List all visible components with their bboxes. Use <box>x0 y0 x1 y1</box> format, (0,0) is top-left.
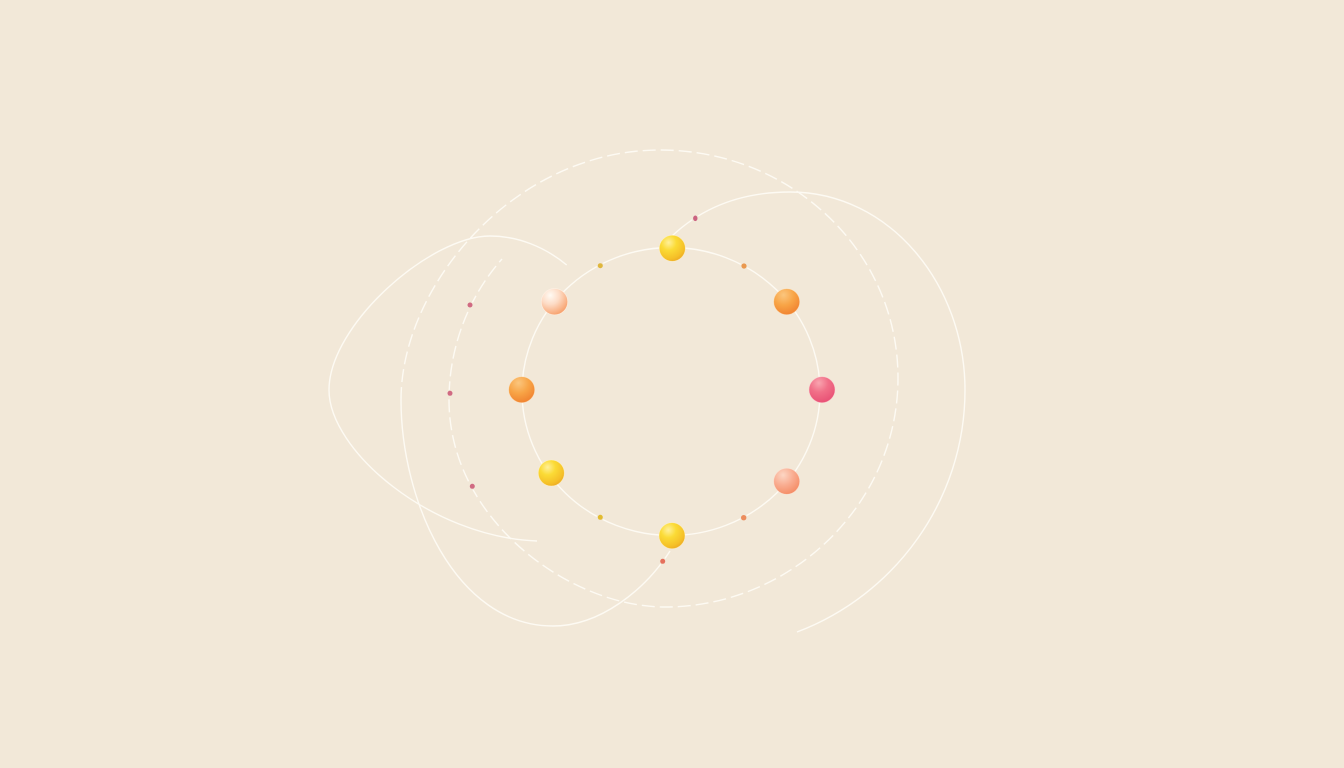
node: upper right orange <box>774 289 800 315</box>
node: upper left pale peach <box>541 288 568 315</box>
small dots <box>446 215 748 565</box>
node spheres <box>509 235 835 549</box>
node: lower right salmon <box>774 468 800 494</box>
lower solid swirl <box>401 400 670 626</box>
node: right pink <box>809 377 835 403</box>
dashed outer orbit <box>401 150 898 607</box>
node: top yellow <box>659 235 685 261</box>
node: lower left yellow <box>538 460 564 486</box>
node: bottom yellow <box>659 523 685 549</box>
right solid swirl <box>672 192 965 632</box>
node: left orange <box>509 377 535 403</box>
central ring <box>522 248 820 536</box>
left solid swirl <box>329 236 567 541</box>
